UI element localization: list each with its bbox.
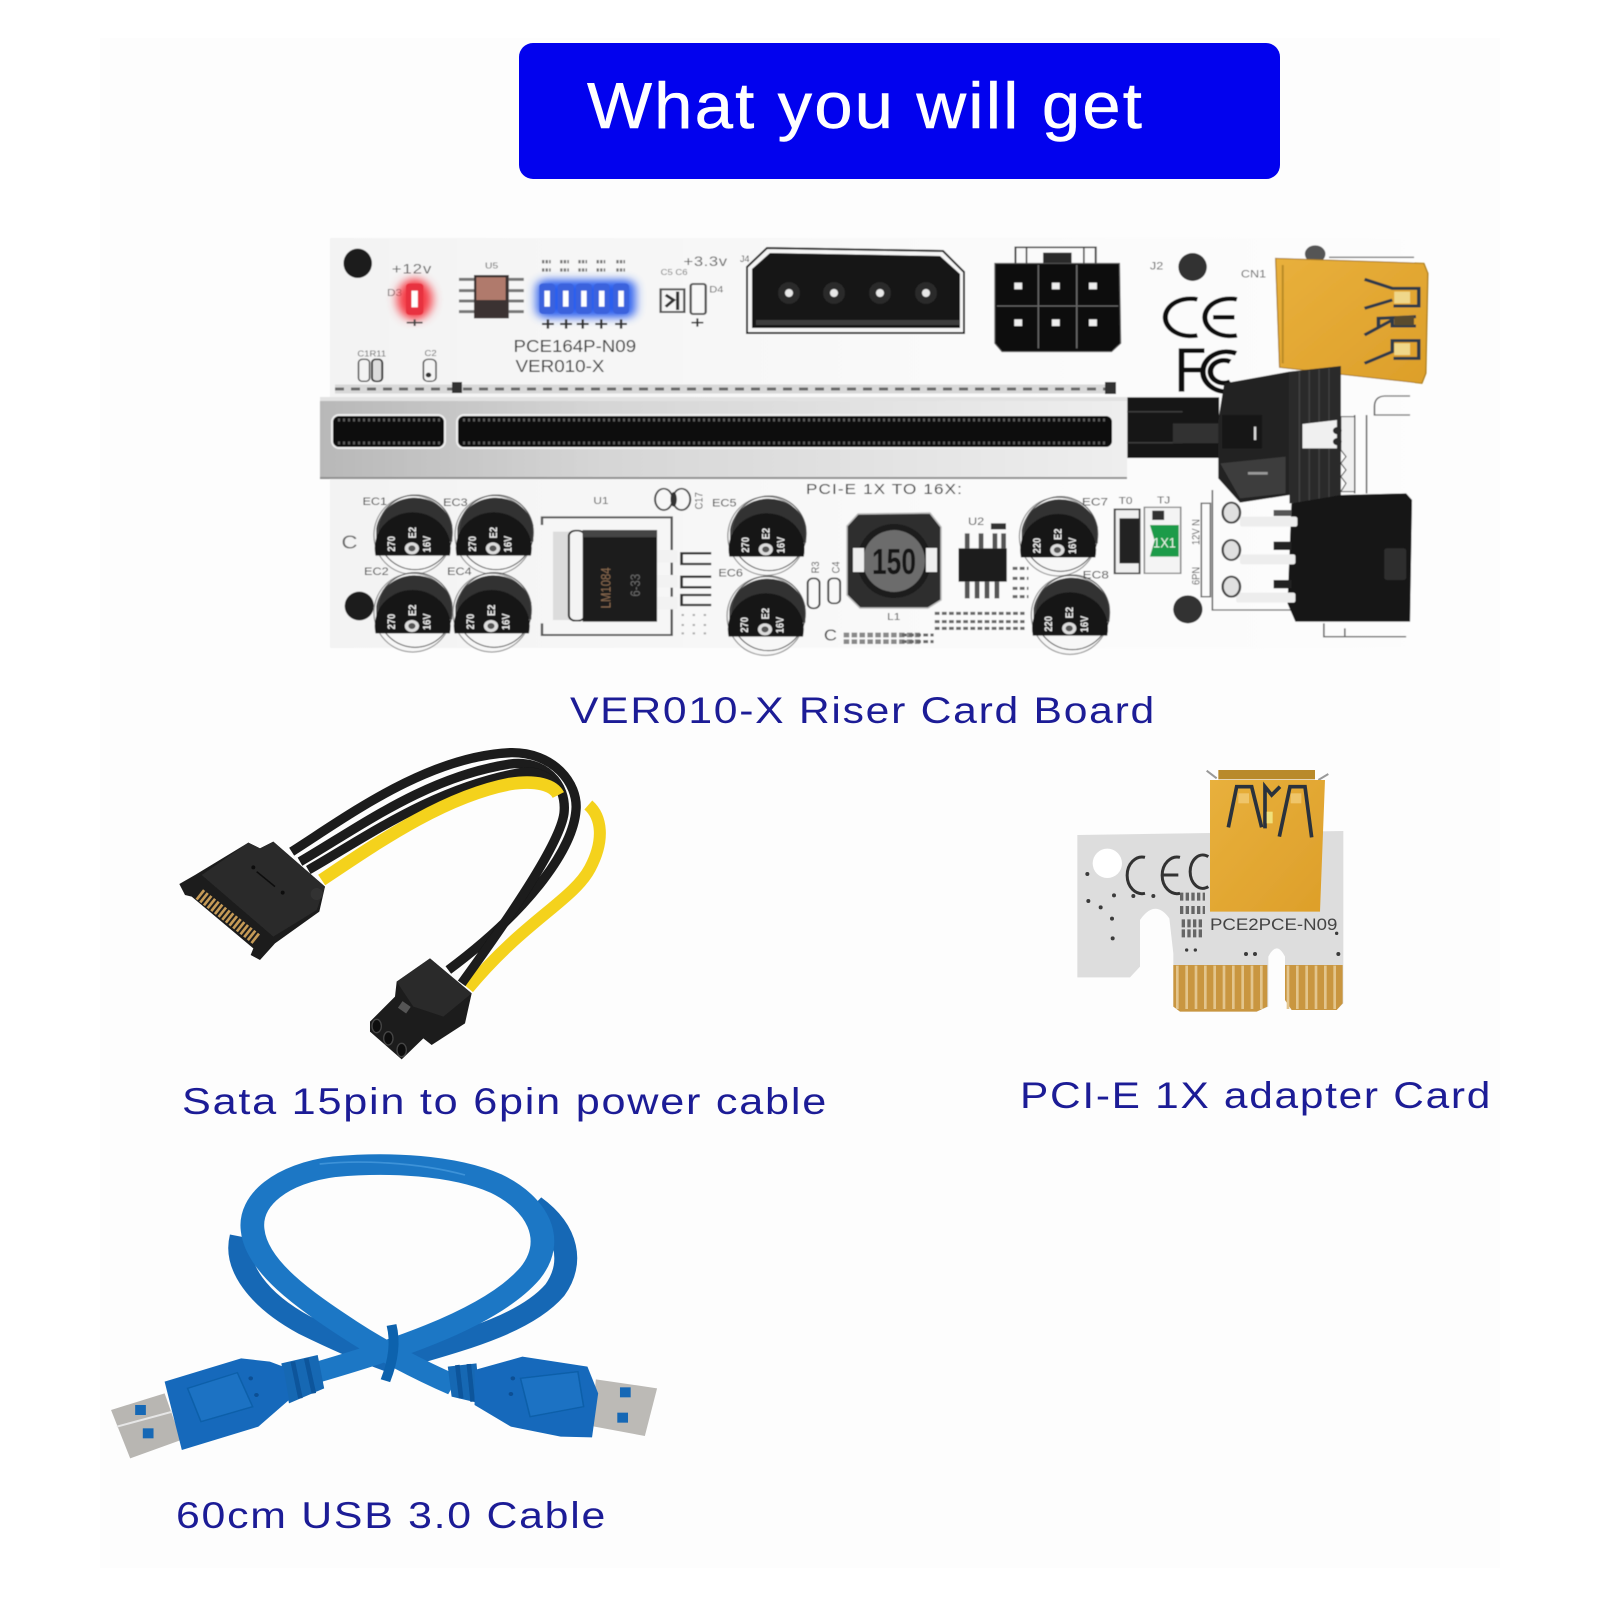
switch T0 xyxy=(1115,496,1140,573)
capacitor EC2: E2 xyxy=(407,604,419,616)
fuse: TJ xyxy=(1157,495,1170,506)
mounting hole top-right xyxy=(1178,253,1207,281)
J2 label: J2 xyxy=(1150,260,1163,272)
blue LEDs xyxy=(536,262,635,329)
flat cable plug xyxy=(1127,397,1220,458)
capacitor designators: EC2 xyxy=(364,566,389,578)
capacitor designators: EC6 xyxy=(718,568,743,579)
small parts xyxy=(1180,897,1205,933)
fuse xyxy=(1144,495,1181,573)
capacitor EC2 xyxy=(374,573,452,652)
EC7 EC8 labels: EC8 xyxy=(1083,568,1109,581)
caption: USB cable: 60cm USB 3.0 Cable xyxy=(176,1495,607,1536)
mounting hole top-left xyxy=(343,249,372,278)
right half of board components xyxy=(902,245,1428,654)
capacitor EC5 xyxy=(728,496,806,575)
riser cable latch xyxy=(1218,366,1342,503)
yellow rear wire xyxy=(468,805,600,988)
C17 pads: C17 xyxy=(694,492,706,509)
capacitor EC5: 16V xyxy=(776,537,788,553)
capacitor EC4: E2 xyxy=(486,604,498,616)
silkscreen C mark: C xyxy=(342,532,358,553)
capacitor EC3 xyxy=(455,495,533,574)
red LED xyxy=(397,279,432,326)
USB 3.0 gold socket xyxy=(1276,245,1428,383)
capacitor EC6: 270 xyxy=(739,617,751,633)
title banner xyxy=(519,43,1280,179)
fuse: 1X1 xyxy=(1153,535,1176,551)
CE mark xyxy=(1165,299,1237,336)
PCIe x16 slot xyxy=(320,397,1127,479)
capacitor designators: EC5 xyxy=(712,498,737,509)
capacitor EC6 xyxy=(727,576,805,655)
adapter PCB xyxy=(1077,831,1343,1012)
C1 R11 C2 pads: C2 xyxy=(425,349,437,358)
capacitor designators: EC1 xyxy=(362,496,387,508)
6-pin side power connector xyxy=(1191,493,1412,622)
U1 regulator: 6-33 xyxy=(628,574,643,597)
left USB plug xyxy=(111,1355,324,1458)
caption: SATA cable: Sata 15pin to 6pin power cable xyxy=(182,1081,828,1122)
silkscreen C: C xyxy=(824,627,837,644)
C1 R11 C2 pads: C1R11 xyxy=(357,349,386,358)
D4 components: C5 C6 xyxy=(661,268,688,277)
adapter model text: PCE2PCE-N09 xyxy=(1210,915,1337,934)
board base xyxy=(330,238,1414,648)
small parts row left xyxy=(844,635,920,642)
mounting hole bottom-right xyxy=(1173,595,1202,623)
capacitor EC5: E2 xyxy=(761,528,773,539)
left half of board components xyxy=(342,249,920,655)
6-pin connector xyxy=(370,958,472,1059)
capacitor EC6: 16V xyxy=(775,617,787,633)
capacitor EC4: 16V xyxy=(501,613,513,630)
gold fingers xyxy=(1173,965,1343,1012)
R3 C4 pads xyxy=(808,561,843,608)
switch T0: T0 xyxy=(1119,496,1133,507)
capacitor EC4 xyxy=(453,573,531,652)
model number text: PCE164P-N09 xyxy=(514,337,636,357)
capacitor EC3: 16V xyxy=(503,536,515,552)
capacitor EC4: 270 xyxy=(465,613,477,629)
U5 chip: U5 xyxy=(485,261,498,271)
capacitor EC7 xyxy=(1019,497,1098,576)
SATA connector xyxy=(179,842,325,960)
D4 components: D4 xyxy=(709,285,724,295)
caption: riser card: VER010-X Riser Card Board xyxy=(570,690,1156,731)
serrated header xyxy=(1341,417,1355,492)
D3 label: D3 xyxy=(387,288,402,299)
capacitor EC3: E2 xyxy=(488,527,500,538)
mounting hole bottom-left xyxy=(345,592,374,620)
L1 label: L1 xyxy=(887,612,900,623)
silkscreen vias xyxy=(1085,872,1340,956)
USB 3.0 blue cable xyxy=(111,1162,657,1458)
+12v label: +12v xyxy=(392,261,432,277)
capacitor EC7: E2 xyxy=(1053,528,1065,540)
caption: adapter: PCI-E 1X adapter Card xyxy=(1020,1075,1492,1116)
U2 chip xyxy=(959,516,1007,598)
capacitor EC8: 16V xyxy=(1079,616,1091,632)
capacitor designators xyxy=(362,496,743,579)
title banner: What you will get xyxy=(587,69,1144,142)
capacitor designators: EC4 xyxy=(447,566,472,578)
R3 C4 pads: C4 xyxy=(831,561,843,573)
riser card board xyxy=(320,238,1428,655)
C1 R11 C2 pads xyxy=(357,349,437,381)
SATA to 6-pin power cable xyxy=(179,753,600,1059)
U1 regulator xyxy=(542,496,711,635)
capacitor EC6: E2 xyxy=(760,608,772,619)
4-pin Molex connector J4: J4 xyxy=(740,254,750,264)
FCC mark xyxy=(1182,351,1236,392)
rear cable strands xyxy=(240,1205,566,1362)
C17 pads xyxy=(655,489,706,510)
capacitor EC1: 16V xyxy=(422,536,434,552)
6-pin power socket xyxy=(995,247,1121,352)
U2 chip: U2 xyxy=(968,516,984,528)
capacitor EC8: E2 xyxy=(1065,607,1076,618)
front cable strand xyxy=(252,1165,542,1385)
capacitor designators: EC3 xyxy=(443,497,468,509)
6-pin side power connector: 12V N xyxy=(1191,519,1203,545)
R3 C4 pads: R3 xyxy=(810,561,822,573)
adapter CE mark xyxy=(1127,855,1208,894)
right USB plug xyxy=(448,1357,657,1437)
inductor 150: 150 xyxy=(872,541,916,582)
capacitor EC8: 220 xyxy=(1044,616,1055,632)
solder strip above slot xyxy=(335,382,1116,394)
+3.3v label: +3.3v xyxy=(684,254,727,270)
capacitor EC3: 270 xyxy=(467,536,479,552)
capacitor EC8 xyxy=(1031,575,1110,654)
capacitor EC7: 220 xyxy=(1032,538,1044,553)
CN1 label: CN1 xyxy=(1241,268,1266,280)
cable highlight xyxy=(320,1162,465,1175)
4-pin Molex connector J4 xyxy=(740,248,964,333)
capacitor EC1: E2 xyxy=(407,527,419,538)
capacitor EC2: 16V xyxy=(422,613,434,630)
strip end pads and outlines xyxy=(1201,396,1410,637)
PCI-E 1X adapter card xyxy=(1077,770,1343,1012)
D4 components xyxy=(661,268,724,327)
U1 regulator: LM1084 xyxy=(598,567,614,608)
inductor 150 xyxy=(847,513,941,608)
U5 chip xyxy=(459,261,524,318)
cable tie xyxy=(385,1325,394,1381)
version text: VER010-X xyxy=(515,357,605,377)
USB socket on adapter xyxy=(1207,770,1328,912)
EC7 EC8 labels xyxy=(1082,495,1109,581)
PCI-E 1X to 16X text: PCI-E 1X TO 16X: xyxy=(806,481,963,498)
capacitor EC5: 270 xyxy=(740,537,752,553)
capacitor EC1 xyxy=(374,495,452,574)
mounting hole xyxy=(1093,849,1122,878)
capacitor EC2: 270 xyxy=(386,613,398,629)
capacitor EC1: 270 xyxy=(386,536,398,552)
EC7 EC8 labels: EC7 xyxy=(1082,495,1108,508)
yellow front wire xyxy=(322,783,558,880)
capacitor EC7: 16V xyxy=(1067,537,1079,554)
6-pin side power connector: 6PN xyxy=(1191,567,1203,585)
resistor pads group xyxy=(902,568,1029,642)
black wires xyxy=(292,753,576,983)
U1 regulator: U1 xyxy=(593,496,609,507)
